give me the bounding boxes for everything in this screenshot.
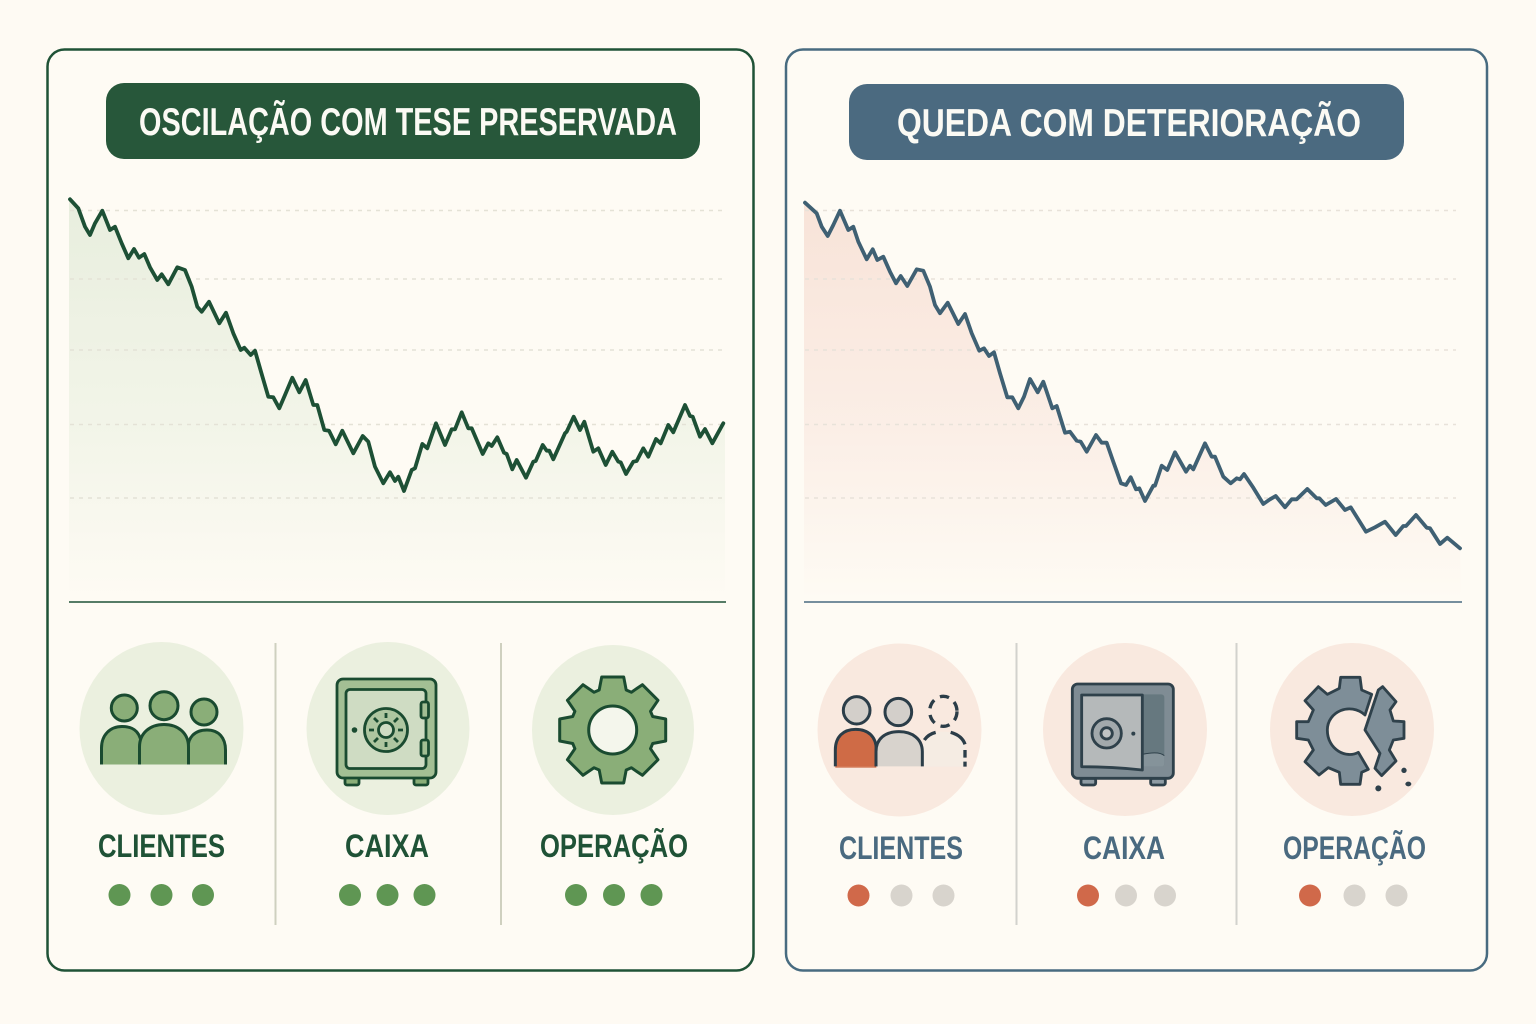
metric: caixa (em deterioração): [1043, 643, 1207, 906]
icon: engrenagem quebrada: [1270, 643, 1434, 816]
label: operação: OPERAÇÃO: [540, 828, 688, 864]
heading: queda com deterioração: [849, 84, 1404, 160]
panel: queda com deterioração: [786, 50, 1487, 970]
icon: pessoas com uma ausente: [818, 644, 982, 816]
label: caixa: CAIXA: [1083, 830, 1165, 866]
icon: engrenagem inteira: [532, 645, 694, 815]
line chart: queda contínua: [804, 201, 1462, 602]
status dots: três verdes: [108, 884, 214, 906]
metric: clientes (saudável): [80, 642, 244, 906]
icon: cofre fechado: [306, 642, 470, 815]
metric: operação (saudável): [532, 645, 694, 906]
heading: oscilação com tese preservada: [106, 83, 700, 159]
metric: operação (em deterioração): [1270, 643, 1434, 906]
label: clientes: CLIENTES: [839, 830, 963, 866]
icon: cofre aberto e vazio: [1043, 643, 1207, 816]
status dots: um vermelho, dois cinza: [1299, 884, 1408, 906]
label: caixa: CAIXA: [345, 828, 429, 864]
line chart: oscilação e recuperação: [69, 198, 726, 602]
status dots: um vermelho, dois cinza: [848, 884, 954, 906]
metric: clientes (em deterioração): [818, 644, 982, 906]
status dots: três verdes: [565, 884, 662, 906]
panel: oscilação com tese preservada: [48, 50, 754, 970]
status dots: três verdes: [339, 884, 436, 906]
heading: queda com deterioração: QUEDA COM DETERIORAÇÃO: [897, 101, 1361, 145]
label: operação: OPERAÇÃO: [1283, 830, 1426, 866]
label: clientes: CLIENTES: [98, 828, 225, 864]
heading: oscilação com tese preservada: OSCILAÇÃO COM TESE PRESERVADA: [139, 100, 677, 144]
status dots: um vermelho, dois cinza: [1077, 884, 1176, 906]
icon: três pessoas: [80, 642, 244, 815]
metric: caixa (saudável): [306, 642, 470, 906]
